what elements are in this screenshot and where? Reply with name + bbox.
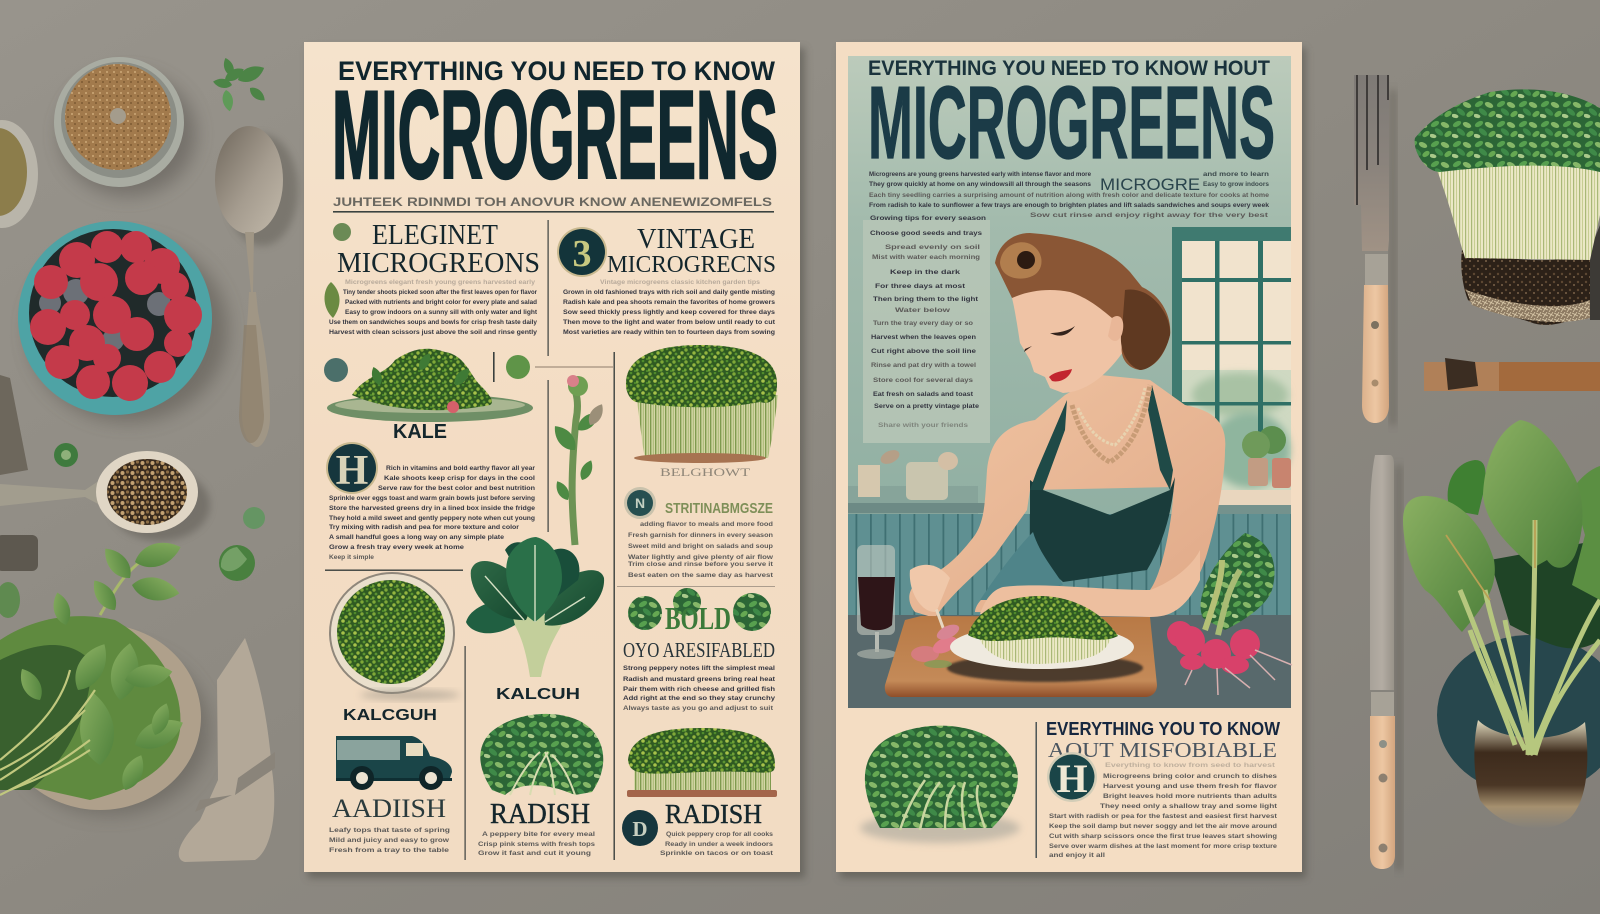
wall notice paper: Store cool for several days — [873, 377, 973, 384]
potted plants on sill — [1242, 426, 1291, 488]
radish caption right: RADISH — [665, 799, 762, 829]
herb mass — [0, 616, 180, 800]
lower headline — [1046, 719, 1280, 762]
numbered badge: 3 — [572, 233, 592, 275]
right poster — [836, 42, 1306, 878]
lower body copy: Bright leaves hold more nutrients than adults — [1103, 793, 1277, 800]
bold section with leaf ornaments — [623, 588, 776, 712]
section: elegant microgreens: Packed with nutrients and bright color for every plate and salad — [345, 299, 537, 306]
H badge: H — [1056, 756, 1088, 801]
wall notice paper: Mist with water each morning — [872, 254, 980, 261]
lower headline: EVERYTHING YOU TO KNOW — [1046, 719, 1280, 739]
forward arm — [980, 550, 1200, 617]
radish caption middle: Grow it fast and cut it young — [478, 850, 591, 857]
wall notice paper: Cut right above the soil line — [871, 348, 976, 355]
green ring leaf — [54, 443, 78, 467]
window — [1172, 227, 1291, 492]
wall notice paper: Turn the tray every day or so — [873, 320, 973, 327]
roots and soil — [1474, 720, 1587, 828]
section: elegant microgreens: Harvest with clean scissors just above the soil and rinse gently — [329, 329, 537, 336]
herb sprig — [212, 56, 268, 112]
cutting board — [885, 616, 1157, 697]
lower body copy — [1049, 762, 1278, 859]
small badge with green heading: Best eaten on the same day as harvest — [628, 572, 774, 579]
H badge and kale text — [326, 442, 535, 561]
dress — [1030, 477, 1175, 582]
section: elegant microgreens — [324, 220, 540, 336]
garbled tagline: JUHTEEK RDINMDI TOH ANOVUR KNOW ANENEWIZOMFELS — [333, 195, 772, 209]
poster title — [332, 56, 778, 205]
left poster: MICROGREENS — [332, 66, 778, 205]
lower headline: AOUT MISFOBIABLE — [1048, 738, 1277, 762]
center leaf — [1483, 420, 1582, 568]
kalcuh label: KALCUH — [496, 686, 580, 703]
poster title: EVERYTHING YOU NEED TO KNOW — [338, 56, 775, 86]
vertical divider — [1036, 722, 1037, 858]
faint caption under tray: BELGHOWT — [660, 465, 751, 479]
lower body copy: and enjoy it all — [1049, 852, 1105, 859]
intro text block: Easy to grow indoors — [1203, 181, 1269, 188]
left poster — [304, 42, 805, 878]
bold section with leaf ornaments: BOLD — [665, 600, 731, 636]
intro text block: From radish to kale to sunflower a few trays are enough to brighten plates and lift salads sandwiches and soups every week — [869, 202, 1269, 209]
section: elegant microgreens: ELEGINET — [372, 220, 498, 251]
section: vintage microgreens: VINTAGE — [637, 223, 755, 255]
H badge and kale text: Sprinkle over eggs toast and warm grain bowls just before serving — [329, 495, 535, 502]
H badge and kale text: Rich in vitamins and bold earthy flavor all year — [386, 465, 535, 472]
intro text block: They grow quickly at home on any windowsill all through the seasons — [869, 181, 1091, 188]
lower body copy: Start with radish or pea for the fastest and easiest first harvest — [1049, 813, 1278, 820]
face — [1012, 272, 1125, 393]
aadiish caption: AADIISH — [332, 794, 446, 823]
herbs in beige bowl — [0, 536, 210, 815]
spinach illustration — [466, 537, 604, 677]
section: elegant microgreens: Use them on sandwiches soups and bowls for crisp fresh taste daily — [329, 319, 537, 326]
hair — [995, 233, 1170, 370]
wall notice paper: Harvest when the leaves open — [871, 334, 976, 341]
kale label: KALE — [393, 421, 447, 443]
small bowl at left edge — [0, 120, 38, 228]
section: elegant microgreens: Tiny tender shoots picked soon after the first leaves open for flavor — [343, 289, 537, 296]
whisk pieces at edge — [0, 375, 38, 618]
H badge and kale text: Grow a fresh tray every week at home — [329, 544, 464, 551]
intro text block — [869, 171, 1269, 219]
section: elegant microgreens: Microgreens elegant fresh young greens harvested early — [345, 279, 535, 286]
leafy microgreen bush illustration — [480, 714, 603, 795]
back leaf — [1448, 460, 1485, 515]
aadiish caption: Mild and juicy and easy to grow — [329, 837, 450, 844]
section: elegant microgreens: MICROGREONS — [337, 247, 540, 279]
numbered badge — [557, 227, 607, 277]
kalcguh label: KALCGUH — [343, 707, 437, 724]
woman illustration — [909, 233, 1225, 618]
left props group — [0, 56, 298, 862]
intro text block: Microgreens are young greens harvested early with intense flavor and more — [869, 171, 1091, 178]
shelf and wainscot — [848, 486, 1291, 616]
bold section with leaf ornaments: Strong peppery notes lift the simplest meal — [623, 665, 775, 672]
plate of microgreens — [950, 596, 1134, 669]
lower body copy: Keep the soil damp but never soggy and let the air move around — [1049, 823, 1277, 830]
right poster title: EVERYTHING YOU NEED TO KNOW HOUT — [868, 57, 1270, 80]
aadiish caption — [329, 794, 450, 854]
wall notice paper: Growing tips for every season — [870, 215, 986, 222]
H badge — [1047, 752, 1097, 802]
measuring spoon with seeds — [0, 451, 210, 541]
intro text block: Sow cut rinse and enjoy right away for the very best — [1030, 212, 1269, 219]
section: vintage microgreens: Most varieties are ready within ten to fourteen days from sowing — [563, 329, 775, 336]
wall notice paper: For three days at most — [875, 283, 966, 290]
section: vintage microgreens: Sow seed thickly press lightly and keep covered for three days — [563, 309, 775, 316]
wall notice paper — [863, 215, 990, 443]
bold section with leaf ornaments: OYO ARESIFABLED — [623, 638, 775, 662]
H badge and kale text: Kale shoots keep crisp for days in the cool — [384, 475, 535, 482]
left leaf — [1403, 496, 1495, 632]
small badge with green heading: STRITINABMGSZE — [665, 500, 773, 517]
eyes and lips — [1024, 326, 1075, 352]
wall notice paper: Choose good seeds and trays — [870, 230, 982, 237]
wall notice paper: Eat fresh on salads and toast — [873, 391, 974, 398]
radish caption middle: A peppery bite for every meal — [482, 831, 595, 838]
wall notice paper: Water below — [895, 307, 951, 314]
radish bunch — [1167, 533, 1292, 695]
small badge with green heading: adding flavor to meals and more food — [640, 521, 773, 528]
skin and arms — [909, 375, 1225, 618]
leafy shade behind stems — [1490, 540, 1600, 648]
wall notice paper: Rinse and pat dry with a towel — [871, 362, 976, 369]
wooden handle — [1424, 358, 1600, 391]
wall notice paper: Serve on a pretty vintage plate — [874, 403, 979, 410]
lower illustration: sprouting bush — [860, 726, 1020, 843]
section: vintage microgreens: Vintage microgreens classic kitchen garden tips — [600, 279, 760, 286]
wall notice paper: Share with your friends — [878, 422, 968, 429]
stems — [1460, 520, 1600, 755]
section: vintage microgreens: Grown in old fashioned trays with rich soil and daily gentle misting — [563, 289, 775, 296]
bold section with leaf ornaments: Add right at the end so they stay crunchy — [623, 695, 775, 702]
intro text block: MICROGRE — [1100, 175, 1200, 194]
illustrated panel wall — [848, 56, 1291, 708]
radish caption right: D — [632, 817, 648, 841]
shelf ornaments — [858, 447, 958, 500]
spinach bunch with roots — [1403, 420, 1600, 828]
radish caption right: Sprinkle on tacos or on toast — [660, 850, 774, 857]
lower body copy: Harvest young and use them fresh for flavor — [1103, 783, 1278, 790]
glass bowl of microgreens — [330, 573, 460, 700]
aadiish caption: Leafy tops that taste of spring — [329, 827, 450, 834]
potted-cut sprout clump with soil — [1415, 89, 1600, 325]
table knife — [1370, 455, 1402, 870]
radish caption right: Quick peppery crop for all cooks — [666, 831, 773, 838]
right leaf — [1572, 466, 1600, 600]
lower body copy: Everything to know from seed to harvest — [1105, 762, 1276, 769]
linen towel — [179, 638, 275, 862]
radish caption middle — [478, 799, 595, 857]
table — [848, 615, 1291, 708]
H badge and kale text: Serve raw for the best color and best nutrition — [378, 485, 535, 492]
delivery van illustration — [336, 736, 452, 790]
tall sprout tray illustration — [626, 345, 778, 463]
glass jar of grain — [54, 57, 196, 196]
lower body copy: Microgreens bring color and crunch to dishes — [1103, 773, 1277, 780]
bold section with leaf ornaments: Radish and mustard greens bring real heat — [623, 676, 776, 683]
vintage spoon — [215, 126, 298, 447]
H badge and kale text: Try mixing with radish and pea for more texture and color — [329, 524, 520, 531]
dark plate — [1437, 635, 1600, 795]
H badge and kale text: Store the harvested greens dry in a lined box inside the fridge — [329, 505, 535, 512]
small badge with green heading: N — [635, 495, 645, 511]
radish caption middle: RADISH — [490, 799, 590, 830]
radish caption right — [622, 799, 774, 857]
kale salad plate illustration — [324, 349, 533, 422]
radish caption right: Ready in under a week indoors — [665, 841, 773, 848]
flowering plant illustration — [549, 375, 607, 545]
scattered leaves — [219, 507, 265, 581]
H badge and kale text: A small handful goes a long way on any simple plate — [329, 534, 504, 541]
H badge and kale text: Keep it simple — [329, 554, 374, 561]
lower body copy: Cut with sharp scissors once the first true leaves start showing — [1049, 833, 1277, 840]
ear — [1108, 316, 1123, 341]
wall notice paper: Keep in the dark — [890, 269, 961, 276]
wall notice paper: Spread evenly on soil — [885, 244, 980, 251]
H badge and kale text: They hold a mild sweet and gently peppery note when cut young — [329, 515, 535, 522]
bold section with leaf ornaments: Always taste as you go and adjust to suit — [623, 705, 774, 712]
aadiish caption: Fresh from a tray to the table — [329, 847, 450, 854]
section: vintage microgreens — [557, 223, 776, 336]
small badge with green heading — [624, 487, 774, 579]
intro text block: Each tiny seedling carries a surprising amount of nutrition along with fresh color and delicate texture for cooks at home — [869, 192, 1269, 199]
lower body copy: They need only a shallow tray and some light — [1100, 803, 1278, 810]
H badge and kale text: H — [336, 448, 368, 494]
section: vintage microgreens: Radish kale and pea shoots remain the favorites of home growers — [563, 299, 775, 306]
small badge with green heading: Water lightly and give plenty of air flow — [628, 554, 774, 561]
intro text block: and more to learn — [1203, 171, 1269, 178]
hand and radish slices — [910, 565, 961, 668]
small badge with green heading: Fresh garnish for dinners in every season — [628, 532, 773, 539]
small badge with green heading: Trim close and rinse before you serve it — [628, 561, 774, 568]
section: vintage microgreens: MICROGRECNS — [607, 252, 776, 278]
right poster title — [868, 57, 1275, 180]
teal bowl of raspberries — [18, 221, 228, 422]
vintage fork — [1354, 75, 1396, 425]
right props group — [1354, 75, 1600, 870]
radish caption middle: Crisp pink stems with fresh tops — [478, 841, 595, 848]
wall notice paper: Then bring them to the light — [873, 296, 979, 303]
wine glass — [857, 545, 897, 659]
section: vintage microgreens: Then move to the light and water from below until ready to cut — [563, 319, 776, 326]
small badge with green heading: Sweet mild and bright on salads and soup — [628, 543, 773, 550]
bold section with leaf ornaments: Pair them with rich cheese and grilled fish — [623, 686, 775, 693]
low sprout tray illustration — [627, 728, 777, 797]
section: elegant microgreens: Easy to grow indoors on a sunny sill with only water and light — [345, 309, 538, 316]
divider lines — [325, 220, 775, 860]
lower body copy: Serve over warm dishes at the last moment for more crisp texture — [1049, 843, 1277, 850]
pearl necklace — [1072, 385, 1150, 462]
